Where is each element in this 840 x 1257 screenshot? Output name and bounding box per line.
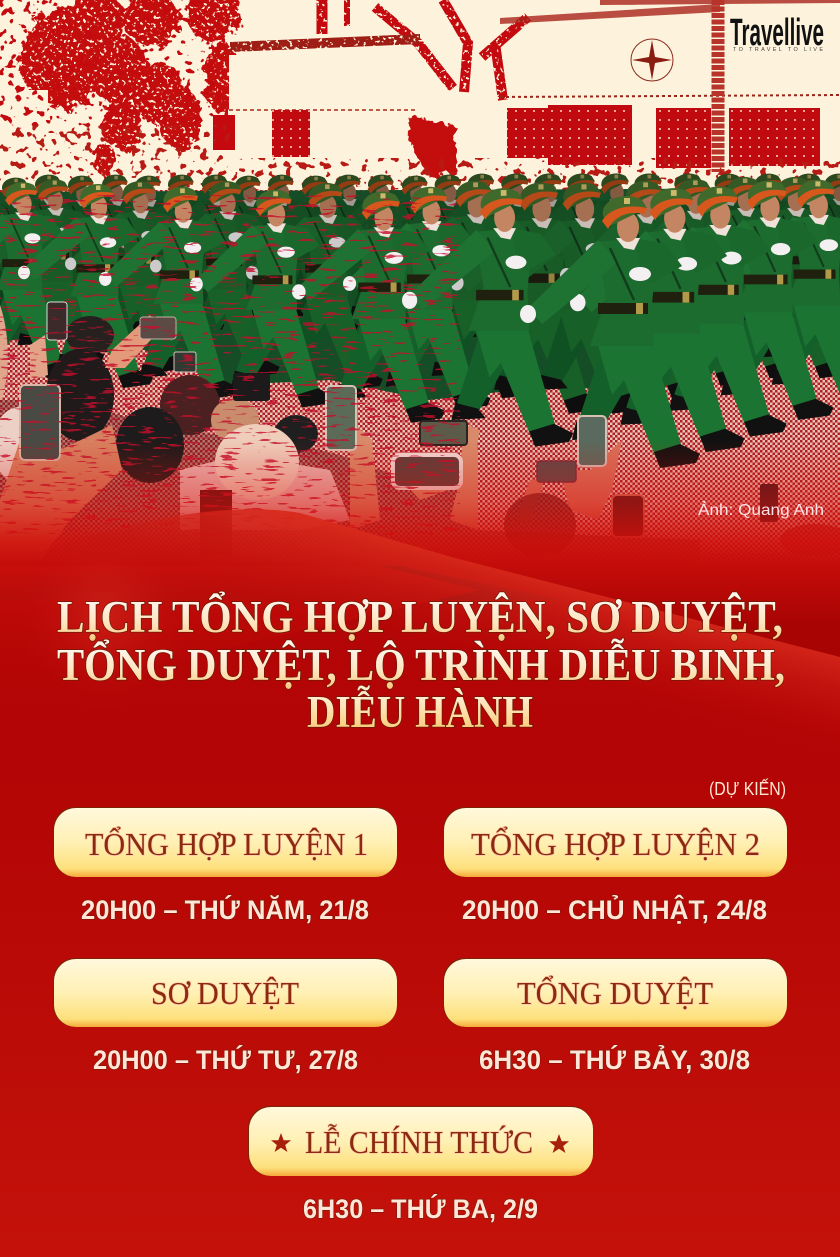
panel: preliminary review: 20H00 – THỨ TƯ, 27/8 xyxy=(93,1044,358,1075)
panel: final review xyxy=(443,958,787,1075)
icon: star emblem on building xyxy=(631,39,673,81)
panel: final review: TỔNG DUYỆT xyxy=(517,975,713,1011)
panel: hero photo xyxy=(0,0,840,600)
title: DIỄU HÀNH xyxy=(307,687,533,737)
red fade over photo xyxy=(0,440,840,566)
halftone parade ground xyxy=(0,190,840,565)
panel: preliminary review xyxy=(53,958,397,1075)
photo print streaks xyxy=(0,195,460,535)
title: LỊCH TỔNG HỢP LUYỆN, SƠ DUYỆT, xyxy=(57,591,783,642)
panel: rehearsal 1: 20H00 – THỨ NĂM, 21/8 xyxy=(81,894,369,925)
panel: rehearsal 1 xyxy=(53,807,397,925)
crowd with phones xyxy=(0,195,840,600)
panel: rehearsal 1: TỔNG HỢP LUYỆN 1 xyxy=(85,826,368,862)
red facade blocks xyxy=(213,105,820,178)
title: TỔNG DUYỆT, LỘ TRÌNH DIỄU BINH, xyxy=(57,639,785,690)
panel: ribbon and light beams xyxy=(0,509,840,780)
panel: preliminary review: SƠ DUYỆT xyxy=(151,975,299,1011)
panel: official ceremony xyxy=(248,1106,593,1224)
panel: rehearsal 2: 20H00 – CHỦ NHẬT, 24/8 xyxy=(462,893,767,925)
panel: final review: 6H30 – THỨ BẢY, 30/8 xyxy=(479,1043,750,1075)
panel: official ceremony: 6H30 – THỨ BA, 2/9 xyxy=(303,1193,538,1224)
logo: Travellive: TO TRAVEL TO LIVE xyxy=(733,47,823,53)
panel: official ceremony: LỄ CHÍNH THỨC xyxy=(305,1123,533,1160)
icon: right star xyxy=(549,1134,569,1153)
panel: rehearsal 2 xyxy=(443,807,787,925)
panel: red background xyxy=(0,520,840,1257)
note: expected: (DỰ KIẾN) xyxy=(709,778,786,799)
phones xyxy=(20,302,778,537)
title xyxy=(57,591,785,737)
marching soldiers xyxy=(0,174,840,468)
photo credit: Ảnh: Quang Anh xyxy=(698,500,824,519)
panel: rehearsal 2: TỔNG HỢP LUYỆN 2 xyxy=(471,826,760,862)
halftone trees and buildings xyxy=(0,0,840,190)
icon: left star xyxy=(271,1133,291,1152)
